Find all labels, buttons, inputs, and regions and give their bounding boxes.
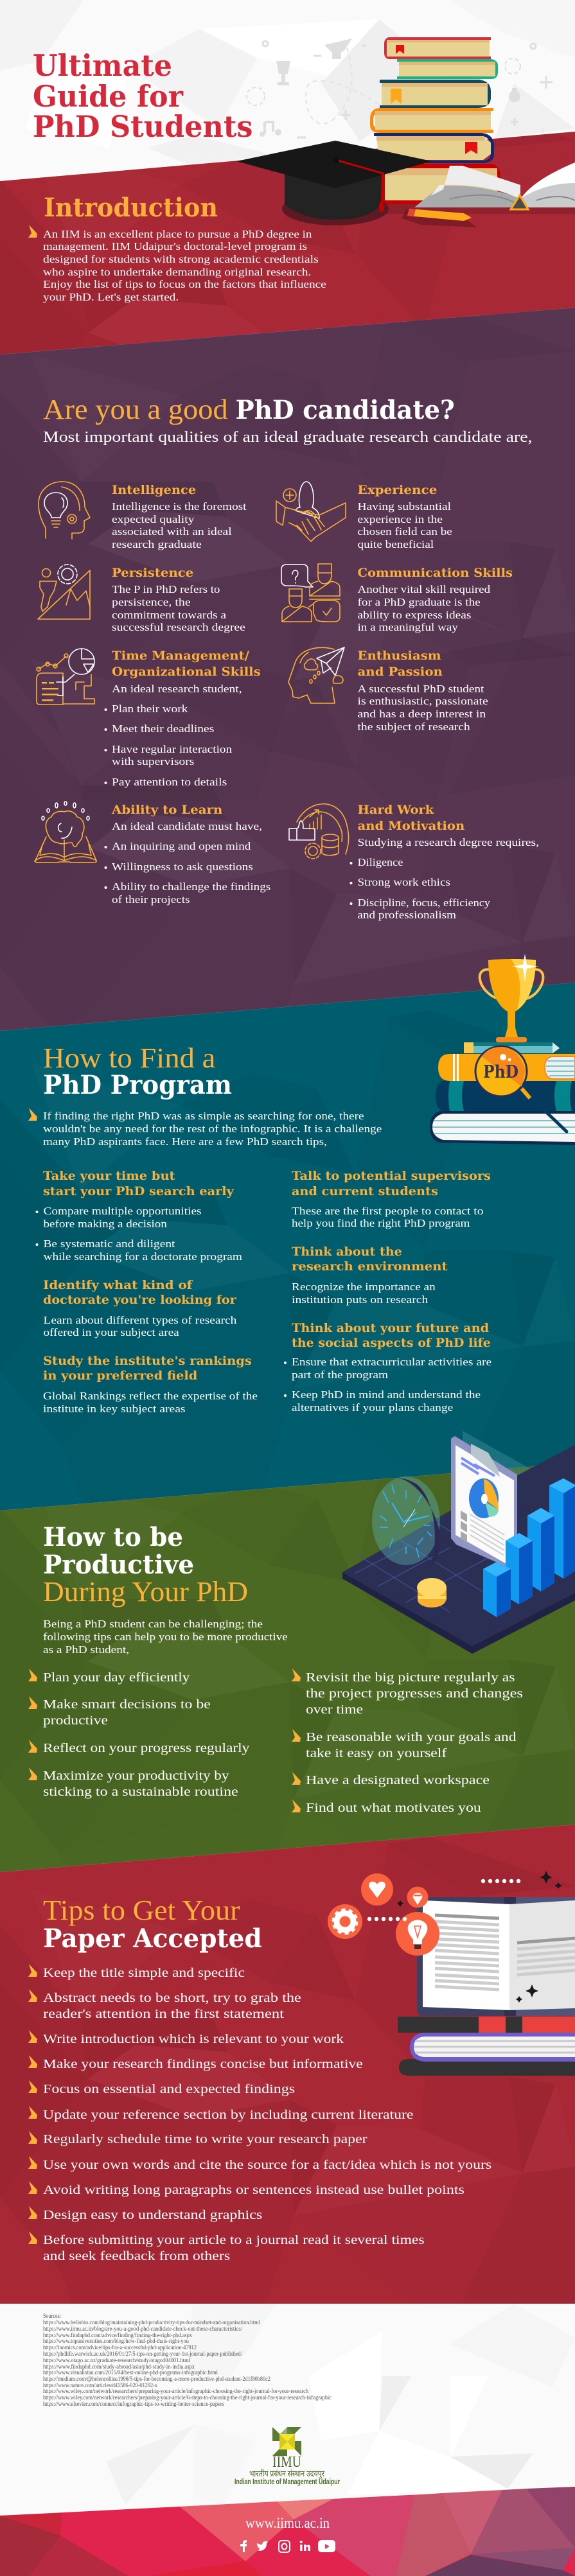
text: ability to express ideas	[357, 609, 471, 621]
text: associated with an ideal	[112, 525, 232, 538]
text and bullets: An inquiring and open mind	[112, 840, 251, 852]
list: productivity tips left: productive	[43, 1713, 108, 1728]
text block: sources: https://www.otago.ac.nz/graduate-research/study/otago404001.html	[43, 2358, 190, 2364]
icon: brain over book	[35, 802, 96, 863]
heading: How to be Productive: Productive	[43, 1550, 194, 1580]
social icons	[240, 2540, 335, 2552]
text block: sources: https://www.iimu.ac.in/blog/are-you-a-good-phd-candidate-check-out-these-characteristics/	[43, 2326, 242, 2333]
text and bullets	[104, 683, 242, 788]
panel: productive background	[0, 1466, 575, 1872]
tip: identify doctorate: doctorate you're looking for	[43, 1293, 236, 1307]
text and bullets: Pay attention to details	[112, 776, 227, 788]
icon: youtube	[318, 2540, 335, 2552]
text: for a PhD graduate is the	[357, 596, 481, 608]
heading: Tips to Get Your Paper Accepted: Paper Accepted	[43, 1923, 262, 1954]
text block: sources: https://www.elsevier.com/connect/infographic-tips-to-writing-better-science-papers	[43, 2401, 224, 2408]
icon: lightbulb bubble	[396, 1912, 439, 1956]
text and bullets: An ideal candidate must have,	[112, 820, 262, 832]
pencil on books	[464, 1042, 560, 1053]
logo: IIMU	[234, 2427, 340, 2486]
list: paper tips: and seek feedback from others	[43, 2249, 230, 2263]
decorative doodles around the title	[247, 39, 553, 257]
dotted connectors	[367, 1879, 520, 1921]
illustration: open paper, icons, books	[328, 1871, 575, 2076]
icon: chevron bullet	[28, 1108, 37, 1121]
panel: sources background	[0, 2304, 575, 2518]
text block: productive intro: following tips can help you to be more productive	[43, 1631, 288, 1643]
title: Ultimate	[33, 48, 172, 83]
platform	[342, 1445, 575, 1654]
tip: study rankings: in your preferred field	[43, 1369, 197, 1383]
heading: Tips to Get Your Paper Accepted	[43, 1895, 262, 1954]
list: paper tips: Make your research findings concise but informative	[43, 2057, 363, 2071]
coins	[417, 1578, 447, 1608]
tip: talk to supervisors: and current students	[292, 1185, 438, 1198]
icon: climbing with gear	[38, 565, 90, 619]
text block: sources: https://inomics.com/advice/tips-for-a-successful-phd-application-47912	[43, 2344, 197, 2351]
title: Guide for	[33, 79, 184, 114]
icon: chevron bullet	[28, 225, 37, 238]
book orange	[438, 1054, 575, 1081]
tip: take your time: Compare multiple opportunities	[44, 1205, 202, 1217]
text block: find intro: If finding the right PhD was as simple as searching for one, there	[43, 1110, 364, 1122]
text	[357, 500, 452, 550]
list: productivity tips left	[28, 1669, 249, 1799]
card: Ability to Learn	[35, 802, 270, 906]
icon: head with bulb	[39, 482, 90, 539]
tip: identify doctorate: Identify what kind of	[43, 1279, 193, 1292]
list: productivity tips right: Have a designated workspace	[306, 1773, 490, 1787]
title: PhD Students	[33, 109, 253, 144]
list: productivity tips left: Maximize your productivity by	[43, 1769, 229, 1783]
book 5 blue	[374, 133, 494, 163]
list: paper tips: Focus on essential and expected findings	[43, 2082, 295, 2096]
list: paper tips: Use your own words and cite the source for a fact/idea which is not yours	[43, 2158, 491, 2172]
text and bullets: with supervisors	[112, 755, 194, 767]
tip: future and social aspects	[284, 1322, 491, 1414]
heading: How to be Productive	[43, 1522, 248, 1608]
list: paper tips: Before submitting your article to a journal read it several times	[43, 2233, 425, 2247]
text: the subject of research	[357, 721, 471, 733]
list: paper tips: Keep the title simple and specific	[43, 1966, 245, 1980]
pencil	[402, 209, 477, 227]
text block: introduction: your PhD. Let's get started.	[43, 291, 179, 303]
text: Another vital skill required	[357, 583, 491, 595]
text: and has a deep interest in	[357, 708, 486, 720]
tip: take your time: while searching for a doctorate program	[44, 1250, 242, 1263]
book 2 green	[397, 59, 498, 79]
tip: research environment: institution puts on research	[292, 1293, 429, 1306]
list: productivity tips left: Make smart decisions to be	[43, 1697, 211, 1712]
list: paper tips	[28, 1964, 491, 2263]
heading	[112, 649, 261, 679]
tip: study rankings: Global Rankings reflect the expertise of the	[43, 1390, 258, 1402]
tip: talk to supervisors: These are the first people to contact to	[292, 1205, 483, 1217]
text and bullets	[349, 836, 539, 921]
text block: productive intro	[43, 1618, 288, 1656]
text: is enthusiastic, passionate	[357, 695, 488, 707]
text and bullets: Have regular interaction	[112, 743, 232, 755]
text: experience in the	[357, 513, 443, 525]
card: Intelligence	[39, 482, 247, 550]
heading: good PhD candidate: PhD candidate?	[235, 395, 455, 425]
text block: find intro: wouldn't be any need for the rest of the infographic. It is a challenge	[43, 1123, 382, 1135]
card: Communication Skills	[281, 564, 513, 633]
text: research graduate	[112, 538, 202, 550]
icon: people talking	[281, 564, 340, 622]
text block: find intro	[43, 1110, 382, 1148]
text block: sources: https://www.wiley.com/network/researchers/preparing-your-article/infographic-choosing-the-right-journal-for-your-research	[43, 2388, 308, 2395]
icon: pinwheel	[272, 2427, 301, 2456]
tip: talk to supervisors: help you find the right PhD program	[292, 1217, 470, 1229]
book 6 red	[382, 164, 500, 204]
text and bullets: An ideal research student,	[112, 683, 242, 695]
list: productivity tips right: Revisit the big picture regularly as	[306, 1670, 515, 1685]
tip: research environment: Recognize the importance an	[292, 1281, 436, 1293]
tip: research environment: Think about the	[292, 1245, 402, 1259]
text block: introduction	[43, 228, 326, 303]
heading: Communication Skills	[357, 566, 513, 580]
icon: head with paper plane	[288, 647, 344, 703]
list: productivity tips left: Reflect on your progress regularly	[43, 1741, 249, 1755]
tip: research environment: research environment	[292, 1260, 448, 1274]
heading: How to Find a PhD Program: PhD Program	[43, 1070, 232, 1100]
graduation cap	[236, 141, 432, 225]
list: paper tips: Abstract needs to be short, try to grab the	[43, 1991, 301, 2005]
illustration: trophy and books with magnifier	[430, 954, 575, 1145]
text: chosen field can be	[357, 525, 452, 538]
tip: future and social aspects: Keep PhD in mind and understand the	[292, 1389, 481, 1401]
hindi name: भारतीय प्रबंधन संस्थान उदयपुर	[249, 2469, 325, 2479]
list: productivity tips right: take it easy on yourself	[306, 1746, 447, 1760]
text and bullets: and professionalism	[357, 909, 456, 921]
stack of books below	[398, 2017, 575, 2076]
shadow under books	[379, 204, 575, 214]
illustration: stack of books, cap, open book	[236, 37, 575, 227]
card: Hard Work and Motivation	[289, 803, 539, 921]
text	[357, 583, 491, 633]
text	[112, 500, 247, 550]
panel: candidate background	[0, 302, 575, 1105]
heading: Ability to Learn	[111, 803, 223, 817]
heading: How to Find a PhD Program: How to Find a	[43, 1042, 215, 1074]
tip: take your time: Take your time but	[43, 1170, 175, 1183]
list: productivity tips right: Be reasonable with your goals and	[306, 1730, 517, 1744]
card: Time Management	[37, 649, 261, 788]
text block: sources: https://www.nature.com/articles/d41586-020-01292-x	[43, 2383, 157, 2389]
tip: future and social aspects: Think about your future and	[292, 1322, 489, 1335]
icon: gear bubble	[328, 1904, 362, 1939]
tip: identify doctorate	[43, 1279, 237, 1338]
heading: Hard Work	[357, 803, 434, 817]
list: paper tips: Design easy to understand graphics	[43, 2208, 263, 2222]
text block: qualities intro: Most important qualities of an ideal graduate research candidate are,	[43, 429, 532, 446]
list: paper tips: Write introduction which is relevant to your work	[43, 2032, 344, 2046]
text block: sources: https://www.findaphd.com/study-abroad/asia/phd-study-in-india.aspx	[43, 2363, 195, 2370]
trophy	[480, 954, 543, 1042]
text and bullets: Willingness to ask questions	[112, 861, 253, 873]
text and bullets: Strong work ethics	[357, 876, 450, 888]
heading: Experience	[357, 484, 437, 497]
list: paper tips: Update your reference section by including current literature	[43, 2108, 414, 2122]
heading: How to Find a PhD Program	[43, 1042, 232, 1100]
tip: study rankings	[43, 1354, 258, 1415]
heading	[357, 649, 443, 679]
book 3 navy	[380, 80, 491, 108]
list: paper tips: Regularly schedule time to write your research paper	[43, 2132, 367, 2146]
panel: find a program background	[0, 979, 575, 1512]
book 4 orange	[370, 108, 493, 133]
heading	[357, 803, 465, 833]
text block: productive intro: Being a PhD student can be challenging; the	[43, 1618, 263, 1630]
tip: talk to supervisors	[292, 1170, 491, 1229]
clipboard	[451, 1436, 517, 1567]
panel: introduction background	[0, 132, 575, 355]
magnifier with PhD: PhD	[483, 1062, 518, 1082]
text block: sources: https://www.wiley.com/network/researchers/preparing-your-article/6-steps-to-choosing-the-right-journal-for-your-research-infographic	[43, 2394, 332, 2401]
heading: Tips to Get Your Paper Accepted: Tips to Get Your	[43, 1895, 240, 1926]
tip: study rankings: institute in key subject areas	[43, 1403, 185, 1415]
list: productivity tips right: Find out what motivates you	[306, 1801, 481, 1815]
list: productivity tips left: Plan your day efficiently	[43, 1670, 190, 1685]
text: in a meaningful way	[357, 621, 459, 633]
icon: minus pin bubble	[407, 1887, 428, 1907]
text and bullets: Diligence	[357, 856, 403, 868]
illustration: isometric dashboard	[342, 1431, 575, 1654]
heading: and Passion	[357, 665, 443, 679]
text block: introduction: An IIM is an excellent place to pursue a PhD degree in	[43, 228, 312, 240]
text: persistence, the	[112, 596, 191, 608]
open book	[414, 162, 575, 209]
tip: identify doctorate: offered in your subject area	[44, 1326, 179, 1338]
text and bullets: Plan their work	[112, 703, 188, 715]
text block: introduction: designed for students with strong academic credentials	[43, 253, 319, 265]
list: paper tips: Avoid writing long paragraphs or sentences instead use bullet points	[43, 2183, 464, 2197]
list: paper tips: reader's attention in the first statement	[43, 2007, 285, 2021]
heading: Enthusiasm	[357, 649, 441, 663]
text block: sources: https://medium.com/@helencollins1996/5-tips-for-becoming-a-more-productive-phd-student-2d1f80b80c2	[43, 2376, 270, 2383]
text: Intelligence is the foremost	[112, 500, 247, 513]
website url: www.iimu.ac.in	[245, 2515, 330, 2531]
text block: sources: https://www.visualistan.com/2015/04/best-online-phd-programs-infographic.html	[43, 2369, 218, 2376]
tip: future and social aspects: the social aspects of PhD life	[292, 1336, 491, 1350]
text block: sources: https://www.topuniversities.com/blog/how-find-phd-thats-right-you	[43, 2338, 189, 2345]
icon: linkedin	[300, 2541, 310, 2551]
text and bullets: of their projects	[112, 893, 190, 906]
text: quite beneficial	[357, 538, 434, 550]
heading: How to be Productive: During Your PhD	[43, 1576, 248, 1608]
list: productivity tips right: the project progresses and changes	[306, 1687, 523, 1701]
text: successful research degree	[112, 621, 245, 633]
list: productivity tips right: over time	[306, 1703, 363, 1717]
text and bullets: Discipline, focus, efficiency	[357, 897, 491, 909]
text: The P in PhD refers to	[112, 583, 220, 595]
list: productivity tips left: sticking to a sustainable routine	[43, 1785, 238, 1799]
tip: take your time: start your PhD search early	[43, 1185, 234, 1198]
icon: thumbs up, coins, gear	[289, 804, 349, 859]
book white	[430, 1111, 575, 1145]
icon: twitter	[257, 2541, 268, 2551]
icon: facebook	[240, 2540, 247, 2552]
tip: take your time: Be systematic and diligent	[44, 1238, 175, 1250]
text and bullets	[104, 820, 270, 906]
text block: introduction: who aspire to undertake demanding original research.	[43, 266, 311, 278]
text: commitment towards a	[112, 609, 227, 621]
card: Enthusiasm and Passion	[288, 647, 488, 733]
clock	[372, 1476, 440, 1565]
text block: sources: https://www.findaphd.com/advice/finding/finding-the-right-phd.aspx	[43, 2332, 192, 2339]
card: Persistence	[38, 565, 245, 633]
text: expected quality	[112, 513, 195, 525]
text block: introduction: Enjoy the list of tips to focus on the factors that influence	[43, 278, 326, 290]
text block: sources: https://phdlife.warwick.ac.uk/2016/01/27/5-tips-on-getting-your-1st-journal-paper-published/	[43, 2351, 242, 2358]
text	[357, 683, 488, 733]
text block: introduction: management. IIM Udaipur's doctoral-level program is	[43, 240, 307, 252]
heading: How to be Productive: How to be	[43, 1522, 183, 1552]
tip: research environment	[292, 1245, 448, 1306]
tip: future and social aspects: alternatives if your plans change	[292, 1401, 453, 1414]
text and bullets: Ability to challenge the findings	[112, 881, 270, 893]
card: Experience	[276, 482, 452, 550]
heading: Intelligence	[112, 484, 196, 497]
title	[33, 48, 253, 144]
heading: Introduction: Introduction	[44, 193, 218, 223]
text block: sources: Sources:	[43, 2313, 61, 2320]
text block: sources	[43, 2313, 332, 2408]
translucent panels	[463, 1431, 535, 1541]
text block: sources: https://www.hellobio.com/blog/maintaining-phd-productivity-tips-for-mindset-and-organisation.html	[43, 2319, 260, 2326]
wordmark: IIMU	[272, 2454, 301, 2471]
tip: identify doctorate: Learn about different types of research	[44, 1314, 237, 1326]
tip: study rankings: Study the institute's rankings	[43, 1354, 252, 1368]
text	[112, 583, 245, 633]
text and bullets: Studying a research degree requires,	[357, 836, 539, 848]
tip: talk to supervisors: Talk to potential supervisors	[292, 1170, 491, 1183]
english name: Indian Institute of Management Udaipur	[234, 2477, 340, 2486]
icon: handshake	[276, 482, 346, 541]
text block: find intro: many PhD aspirants face. Here are a few PhD search tips,	[43, 1135, 327, 1148]
heading: good PhD candidate: Are you a good	[43, 394, 228, 425]
bars	[483, 1478, 575, 1617]
heading: Persistence	[112, 566, 193, 580]
text: Having substantial	[357, 500, 452, 513]
open paper frame	[417, 1897, 575, 2016]
tip: future and social aspects: Ensure that extracurricular activities are	[292, 1356, 491, 1368]
tip: take your time: before making a decision	[44, 1218, 167, 1230]
icon: instagram	[279, 2541, 290, 2552]
icon: time management chart	[37, 649, 94, 705]
tip: take your time	[36, 1170, 242, 1263]
tip: future and social aspects: part of the program	[292, 1369, 388, 1381]
heading: Organizational Skills	[112, 665, 261, 679]
text block: productive intro: as a PhD student,	[43, 1643, 129, 1656]
heading: good PhD candidate	[43, 394, 455, 425]
list: productivity tips right	[292, 1669, 523, 1815]
book 1 red	[384, 37, 491, 59]
heading: Time Management/	[112, 649, 249, 663]
panel: paper accepted background	[0, 1821, 575, 2336]
heading: and Motivation	[357, 819, 465, 833]
magnifier with PhD	[475, 1046, 567, 1132]
sparkles	[397, 1871, 562, 2002]
panel: footer background	[0, 2487, 575, 2576]
text: A successful PhD student	[357, 683, 484, 695]
book dark blue	[436, 1081, 575, 1111]
icon: heart bubble	[361, 1873, 393, 1906]
text and bullets: Meet their deadlines	[112, 723, 214, 735]
panel: header background	[0, 0, 575, 206]
